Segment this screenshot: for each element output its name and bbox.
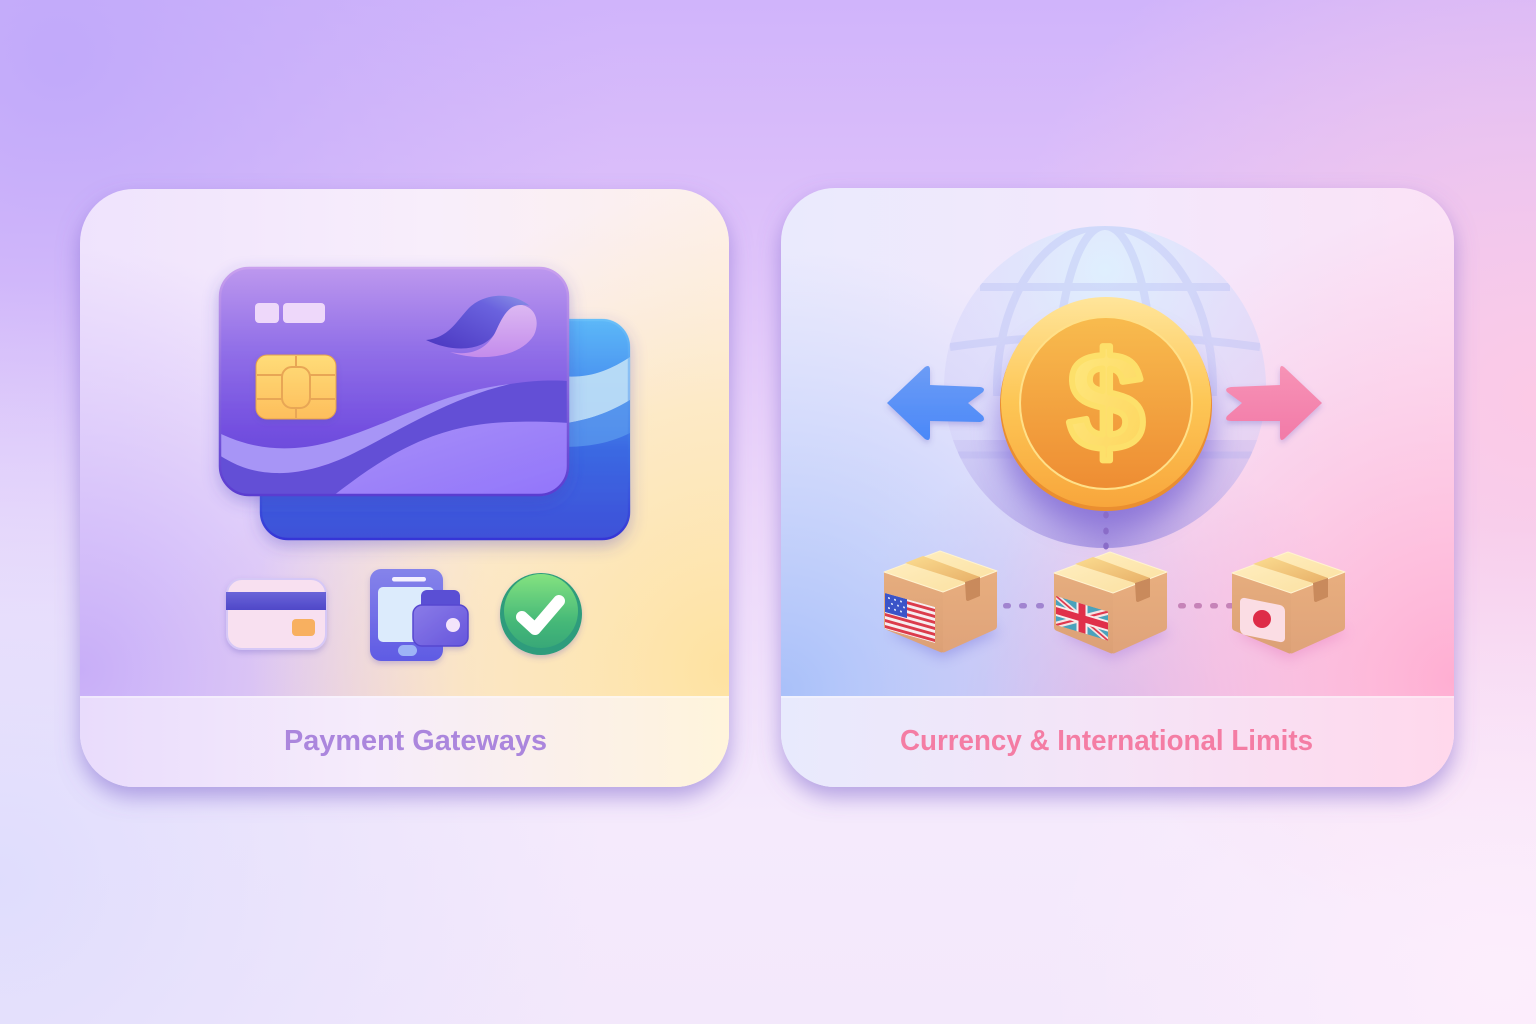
icon: card chip: [256, 355, 336, 419]
icon: card logo swoosh: [426, 296, 537, 357]
label: payment gateways: Payment Gateways: [284, 725, 547, 757]
connector: blue to UK dots: [1003, 603, 1044, 608]
icon: phone with wallet: [370, 569, 468, 661]
icon: box with US flag: [884, 551, 1000, 658]
connector: vertical dots: [1103, 512, 1109, 550]
arrow: left blue: [887, 366, 984, 440]
icon: globe: [944, 226, 1266, 550]
panel: currency and international limits: [781, 188, 1454, 787]
card label pills: [255, 303, 325, 323]
coin shadow: [1000, 328, 1212, 528]
connector: UK to Japan dots: [1178, 603, 1234, 608]
panel: payment gateways: [80, 189, 729, 787]
icon: small pale card: [226, 579, 326, 649]
icon: back blue credit card: [260, 319, 630, 540]
icon: dollar coin: $: [1067, 323, 1145, 480]
panel background: payment gateways: [80, 189, 729, 787]
arrow: right pink: [1226, 366, 1322, 440]
icon: green check badge: [500, 573, 582, 655]
icon: dollar coin: [1000, 297, 1212, 511]
icon: box with Japan flag: [1232, 552, 1348, 659]
panel background: currency: [781, 188, 1454, 787]
icon: box with UK flag: [1054, 552, 1170, 659]
icon: front purple credit card: [219, 267, 569, 496]
label: currency and international limits: Currency & International Limits: [900, 725, 1313, 757]
